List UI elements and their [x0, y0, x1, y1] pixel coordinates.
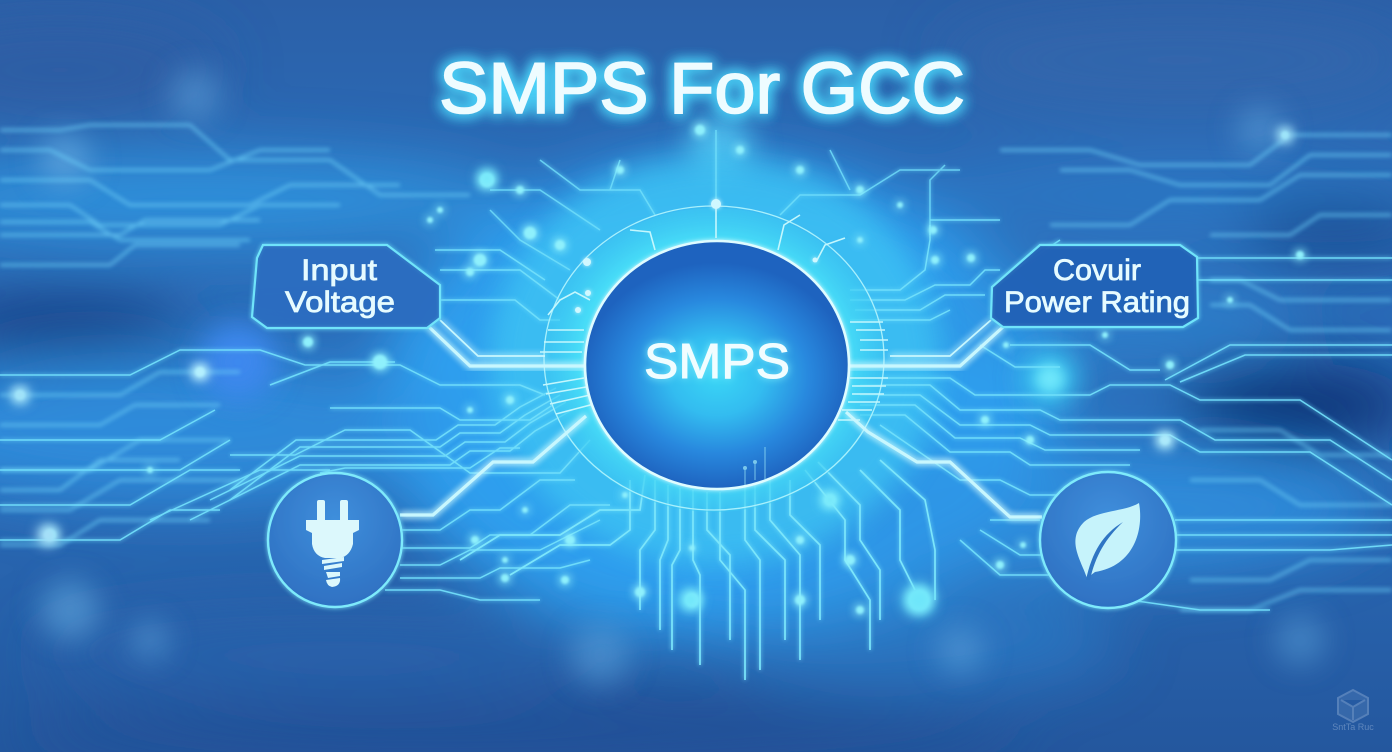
glowing nodes: [15, 125, 1304, 614]
core inner traces: [744, 447, 765, 485]
glowing halo band around core: [540, 199, 888, 512]
watermark text: SntTa Ruc: [1332, 722, 1374, 732]
panel text: power rating: Covuir: [1053, 254, 1141, 287]
main trace: leaf to core: [846, 412, 1042, 517]
central SMPS core: [584, 240, 850, 490]
fine circuit traces: left field: [0, 250, 610, 600]
panel: power rating: [991, 245, 1198, 327]
halo nodes: [575, 199, 818, 313]
blurred far-field circuit traces: [0, 125, 1392, 610]
main trace: plug to core: [400, 416, 586, 515]
out-of-focus soft lights: [39, 69, 1326, 685]
icon badge: plug: [268, 473, 402, 607]
panel text: input voltage: Voltage: [285, 286, 395, 319]
watermark logo: [1338, 690, 1368, 722]
halo circuit connectors: [540, 207, 888, 420]
panel: input voltage: [252, 245, 440, 328]
core label: SMPS: [644, 335, 790, 389]
watermark: [1332, 690, 1374, 732]
icon: leaf: [1075, 503, 1140, 580]
title: SMPS For GCC: [439, 49, 965, 129]
icon badge: leaf: [1040, 472, 1176, 608]
fine circuit traces: right field: [850, 220, 1392, 610]
panel text: input voltage: Input: [301, 254, 378, 287]
bright lens flares: [11, 127, 1293, 616]
panel text: power rating: Power Rating: [1004, 286, 1190, 319]
centre circuit glow: [490, 155, 940, 565]
main trace: input voltage to core: [428, 320, 586, 366]
fine circuit traces: bottom fan: [460, 460, 935, 680]
main trace: power rating to core: [848, 320, 1003, 366]
icon: plug: [306, 500, 359, 587]
fine circuit traces: upper fan: [490, 130, 960, 270]
